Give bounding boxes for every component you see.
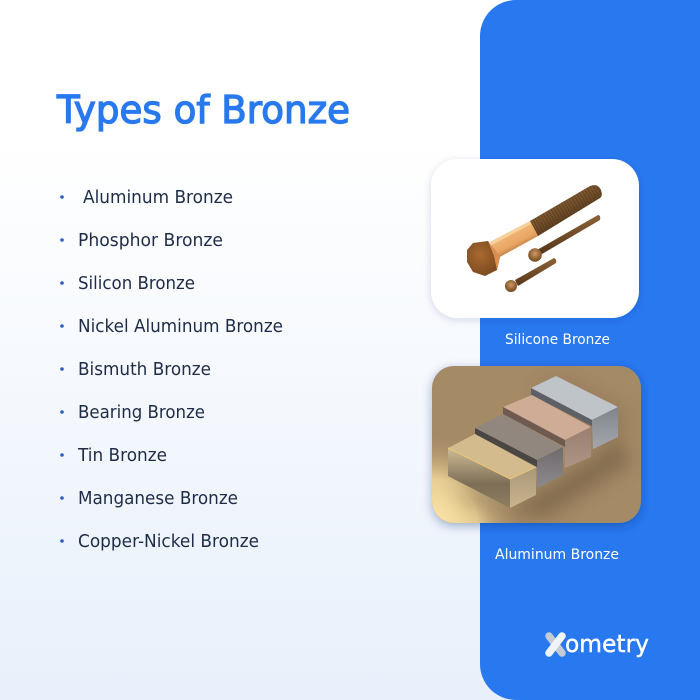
image card: silicone bronze bolts	[431, 159, 639, 318]
caption: aluminum bronze: Aluminum Bronze	[495, 547, 619, 563]
item: Bismuth Bronze: Bismuth Bronze	[78, 360, 211, 380]
item: Silicon Bronze: Silicon Bronze	[78, 274, 195, 294]
blue side panel	[480, 0, 700, 700]
item: Copper-Nickel Bronze: Copper-Nickel Bronze	[78, 532, 259, 552]
item: Tin Bronze: Tin Bronze	[77, 446, 167, 466]
pink block	[503, 395, 591, 468]
gold block	[448, 434, 536, 508]
caption: silicone bronze: Silicone Bronze	[505, 332, 610, 348]
icon: short pin	[505, 258, 556, 292]
title: Types of Bronze	[56, 88, 350, 132]
item: Aluminum Bronze: Aluminum Bronze	[83, 188, 233, 208]
grey block	[475, 414, 563, 488]
bronze types list	[60, 188, 283, 552]
icon: long pin	[528, 215, 600, 262]
logo: Xometry: ometry	[565, 630, 649, 658]
item: Nickel Aluminum Bronze: Nickel Aluminum Bronze	[78, 317, 283, 337]
item: Phosphor Bronze: Phosphor Bronze	[78, 231, 223, 251]
silver block	[531, 376, 618, 449]
item: Manganese Bronze: Manganese Bronze	[78, 489, 238, 509]
item: Bearing Bronze: Bearing Bronze	[78, 403, 205, 423]
icon: large bolt	[467, 185, 602, 276]
image card: aluminum bronze blocks	[432, 366, 641, 523]
